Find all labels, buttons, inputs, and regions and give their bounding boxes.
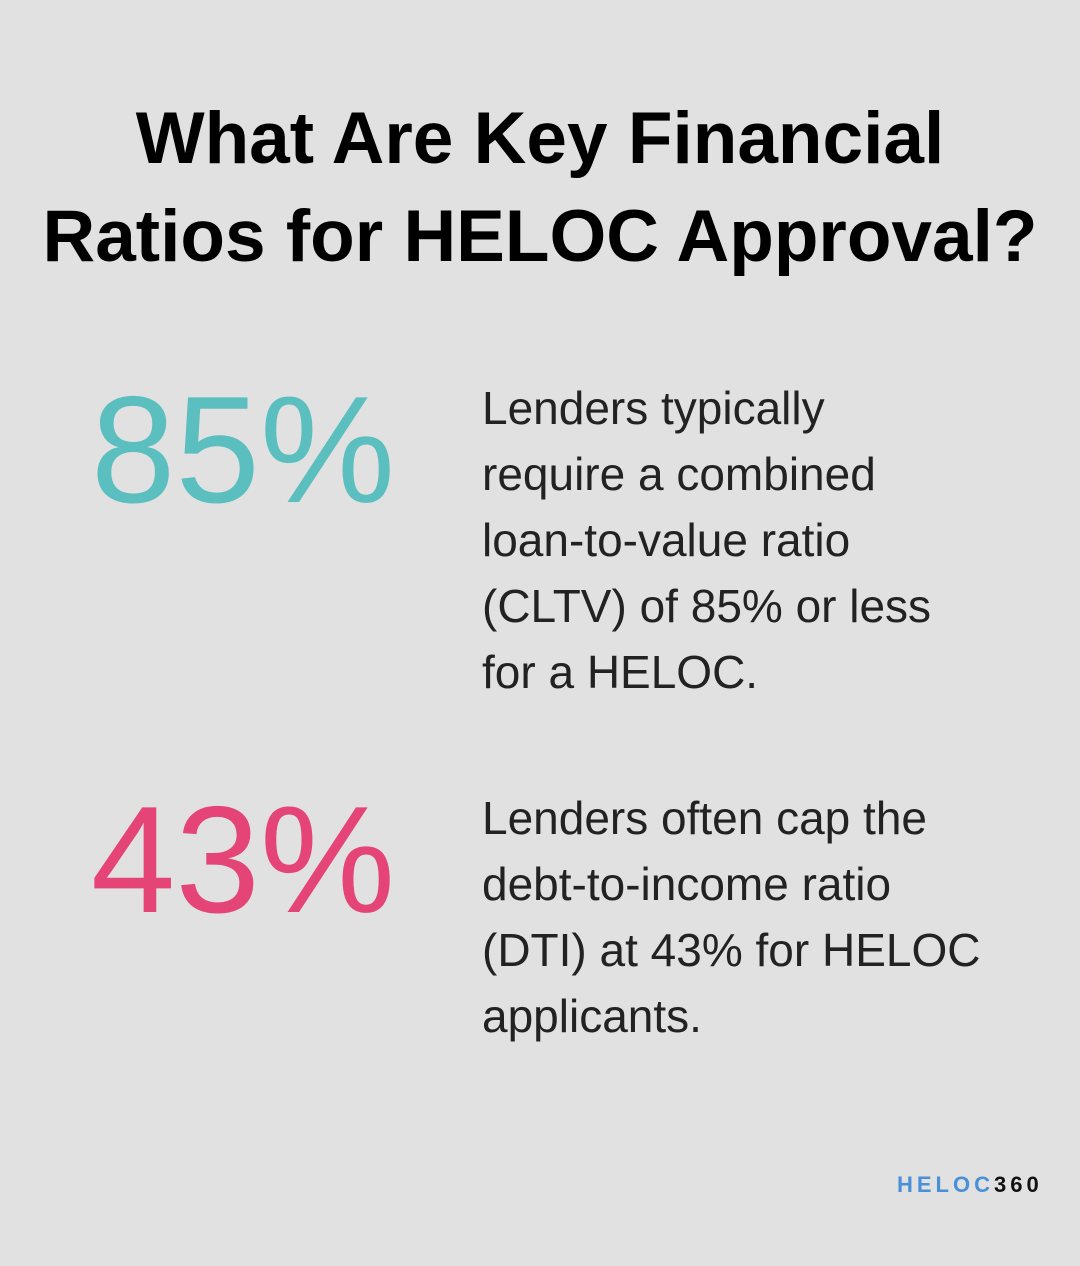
title: Ratios for HELOC Approval? (42, 196, 1038, 277)
text: CLTV description: for a HELOC. (482, 646, 758, 698)
text: DTI description: (DTI) at 43% for HELOC (482, 924, 980, 976)
text: CLTV description: require a combined (482, 448, 876, 500)
title: What Are Key Financial (136, 98, 944, 179)
text: CLTV description (482, 382, 931, 698)
stat: 43%: 43% (91, 775, 395, 945)
text: CLTV description: (CLTV) of 85% or less (482, 580, 931, 632)
logo: HELOC360 (897, 1172, 1043, 1197)
text: DTI description: debt-to-income ratio (482, 858, 891, 910)
stat: 85%: 85% (91, 365, 395, 535)
text: CLTV description: Lenders typically (482, 382, 825, 434)
title (42, 98, 1038, 277)
text: CLTV description: loan-to-value ratio (482, 514, 850, 566)
text: DTI description: applicants. (482, 990, 702, 1042)
text: DTI description (482, 792, 980, 1042)
text: DTI description: Lenders often cap the (482, 792, 927, 844)
